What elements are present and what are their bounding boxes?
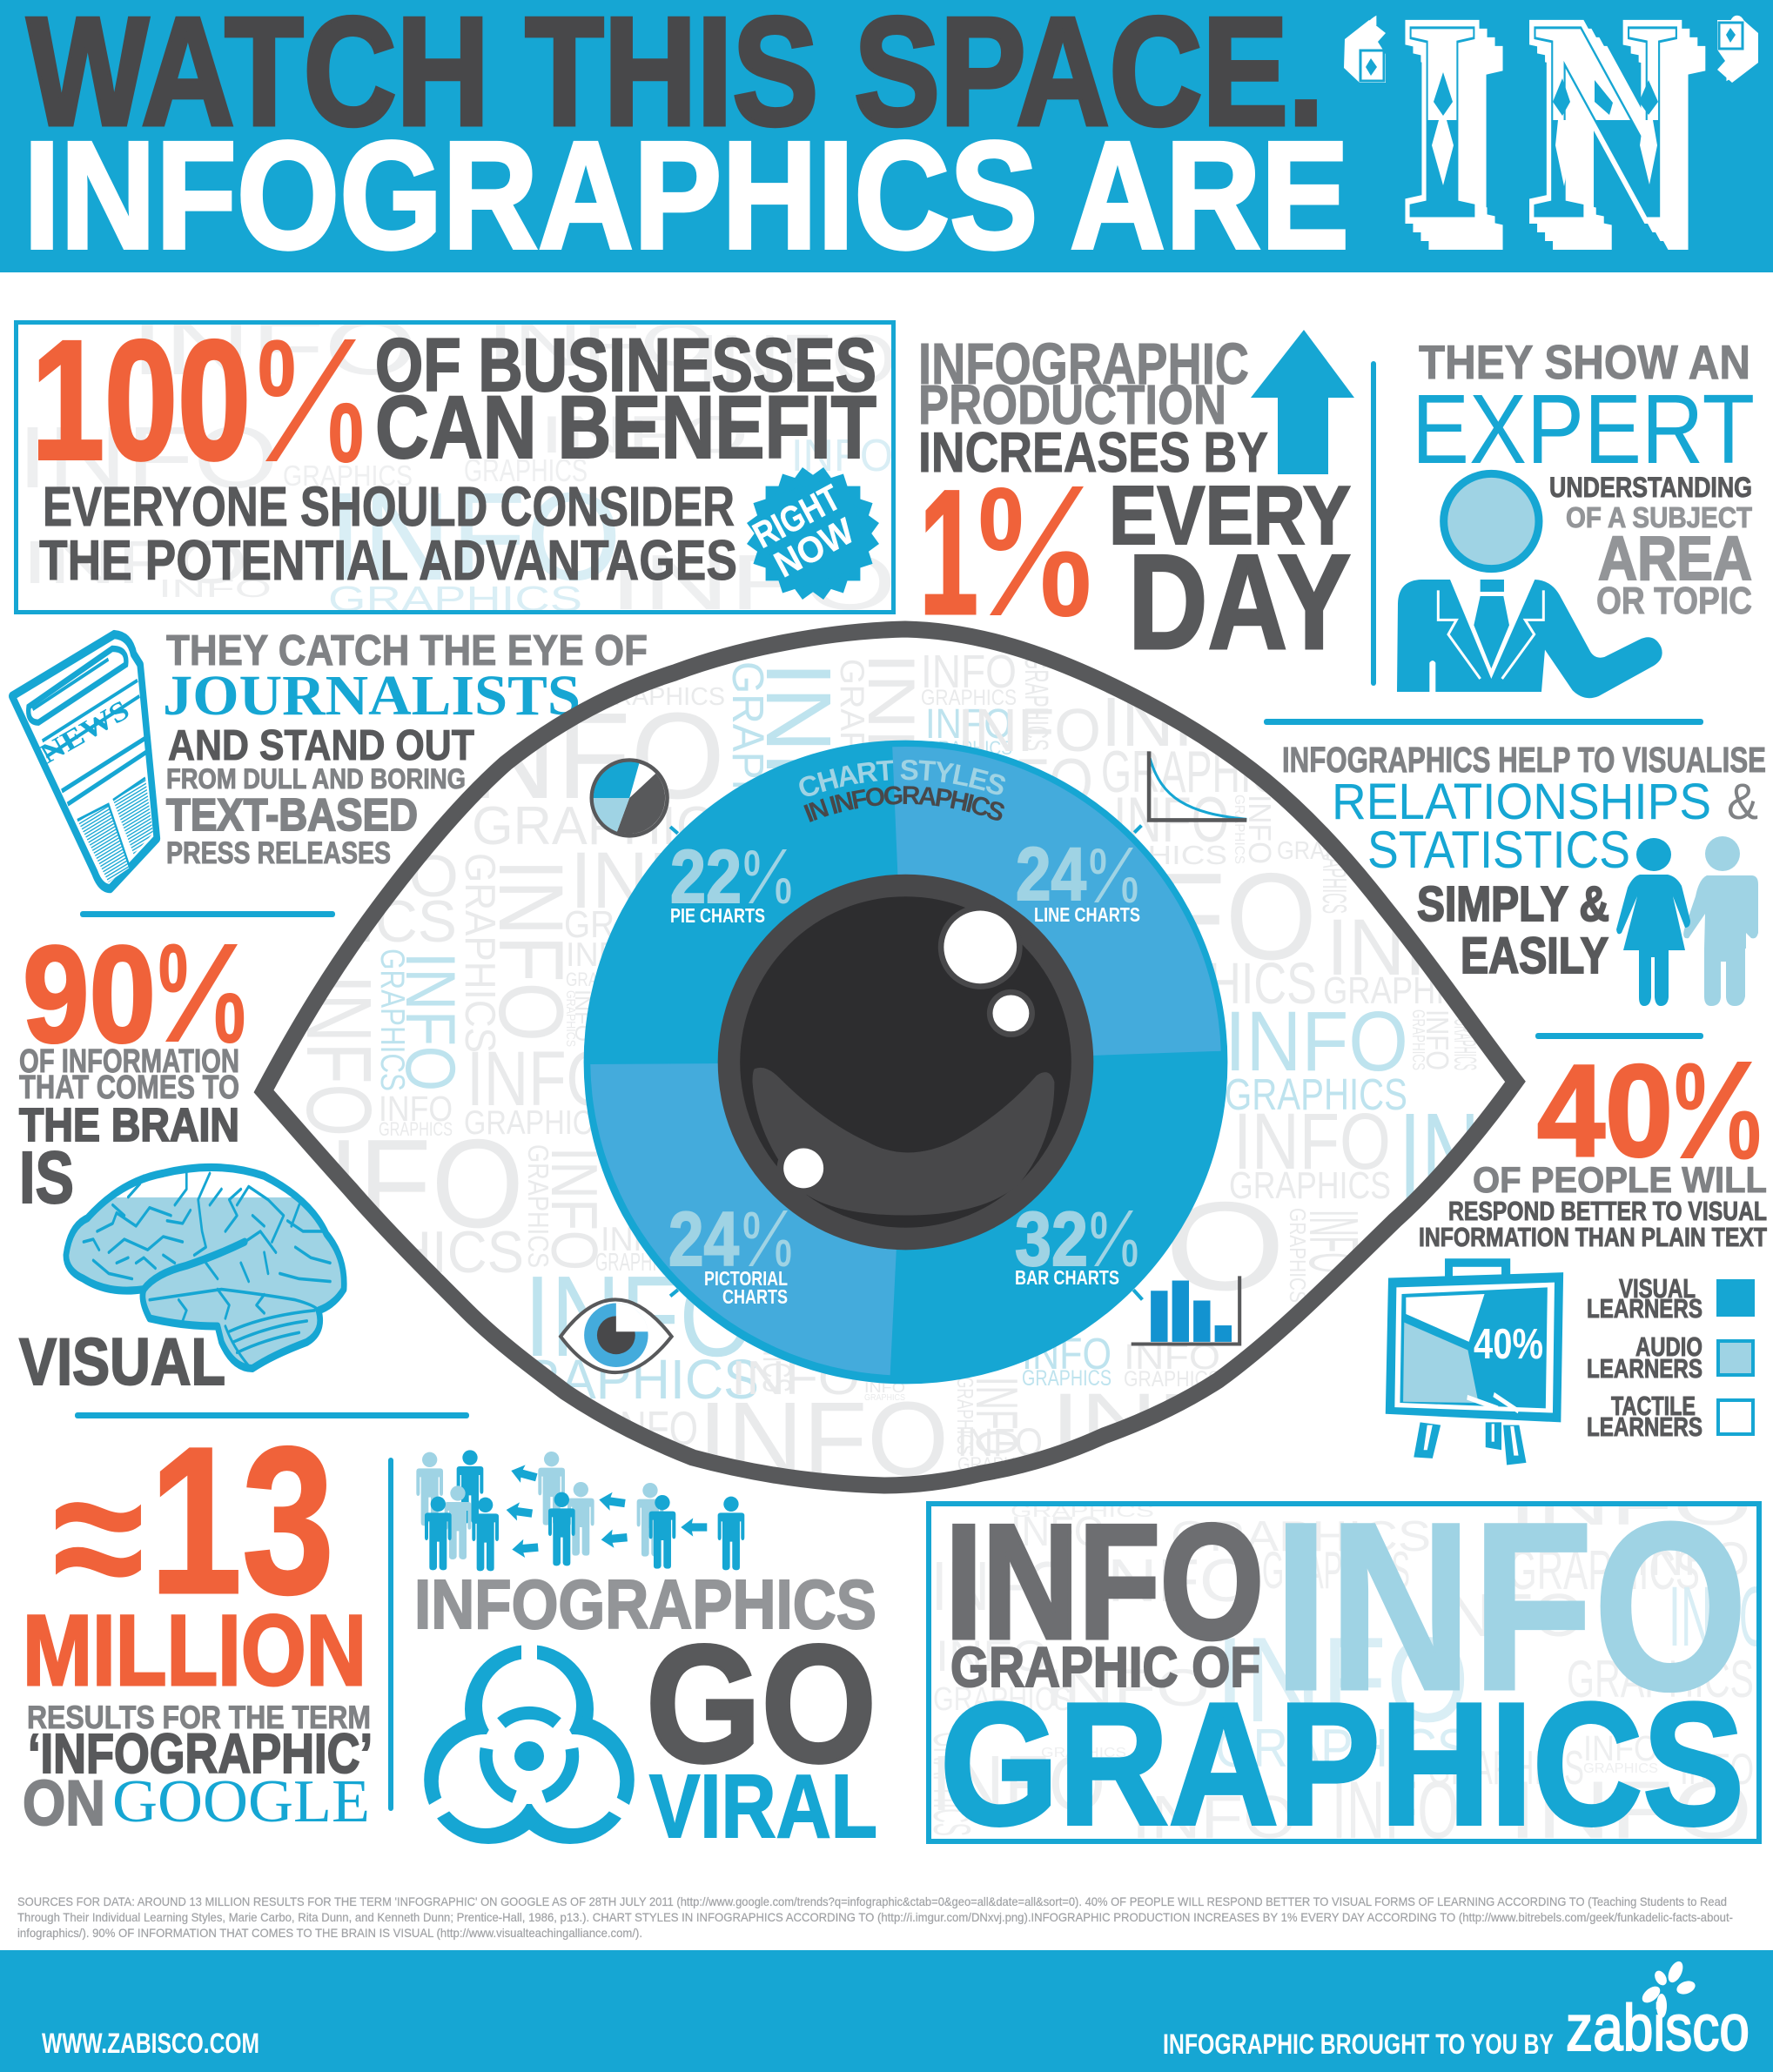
eye watermark background: INFO [524,1252,755,1380]
text: that comes to: THAT COMES TO [19,1070,239,1106]
icon: presentation board: 40% [1474,1321,1543,1368]
section: journalists [12,627,648,888]
eye watermark background: GRAPHICS [1447,1018,1483,1070]
title decorative word IN [1405,19,1706,250]
eye watermark background: INFO [921,646,1017,698]
number 40 percent [1537,1037,1761,1184]
stat: pictorial charts 24 percent: PICTORIAL [704,1267,788,1290]
footer website: WWW.ZABISCO.COM [42,2028,259,2059]
stat: line charts 24 percent: LINE CHARTS [1034,903,1140,926]
badge: right now [746,467,879,600]
eye watermark background: GRAPHICS [952,1377,978,1455]
legend: learner types: LEARNERS [1587,1293,1702,1324]
panel watermark: INFO [931,1547,1071,1625]
stat: pie charts 22 percent: 0 [743,842,761,883]
panel watermark: INFO [791,431,893,481]
eye watermark background: INFO [1233,1097,1391,1186]
pupil [718,875,1093,1250]
eye watermark background: INFO [601,1221,679,1258]
eye watermark background: GRAPHICS [456,853,503,1053]
symbol: approximately: ≈ [52,1430,144,1644]
eye watermark background: INFO [379,1089,453,1129]
panel watermark: GRAPHICS [933,1681,1071,1718]
number 90 percent: 90 [23,918,156,1071]
eye watermark background: INFO [609,1401,698,1455]
eye watermark background: GRAPHICS [1022,1366,1111,1391]
eye watermark background: INFO [1420,1009,1455,1070]
heading: can benefit: CAN BENEFIT [375,378,876,477]
panel watermark: INFO [1088,1546,1253,1614]
stat: line charts 24 percent: 24 [1016,833,1086,916]
eye watermark background: INFO [854,653,928,835]
eye watermark background: GRAPHICS [1285,1208,1311,1303]
eye watermark background: GRAPHICS [1232,795,1246,864]
stat: pictorial charts 24 percent [668,1196,792,1308]
eye watermark background: GRAPHICS [1277,837,1393,865]
panel watermark: GRAPHICS [328,579,582,619]
eye watermark background: GRAPHICS [864,1393,905,1403]
stat: pictorial charts 24 percent: CHARTS [722,1285,788,1308]
stat: pictorial charts 24 percent: 0 [742,1204,761,1247]
heading: of businesses: OF BUSINESSES [375,324,876,407]
eye watermark background: INFO [698,1379,949,1498]
footer band [0,1950,1773,2072]
icon: brain [66,1167,344,1368]
eye watermark background: INFO [1101,683,1275,761]
eye watermark background: INFO [957,1420,1043,1465]
eye watermark background: INFO [1113,785,1229,855]
eye watermark background: INFO [467,1035,615,1122]
badge: right now: RIGHT [746,476,847,556]
stat: bar charts 32 percent: BAR CHARTS [1015,1266,1119,1289]
text: graphic of: GRAPHIC OF [950,1635,1260,1699]
number 90 percent: 0 [158,932,188,1006]
eye watermark background: GRAPHICS [833,659,870,833]
eye watermark background: GRAPHICS [595,1249,679,1277]
number 40 percent: 0 [1728,1099,1761,1173]
icon: spreading people with arrows [416,1450,744,1571]
panel watermark: INFO [1332,1764,1459,1855]
eye watermark background: GRAPHICS [1124,1367,1220,1391]
text: of people will: OF PEOPLE WILL [1473,1159,1767,1200]
eye watermark background: INFO [864,1379,905,1396]
eye watermark background: INFO [305,843,459,909]
legend: learner types [1587,1273,1755,1442]
eye watermark background: INFO [1036,848,1317,986]
eye watermark background: GRAPHICS [1315,835,1353,914]
icon: bar chart [1132,1276,1239,1344]
big number 100 percent: 0 [328,387,364,479]
stat: production increases 1 percent [918,330,1354,677]
text: easily: EASILY [1461,928,1608,984]
eye watermark background: GRAPHICS [1225,1070,1407,1119]
panel watermark: INFO [931,1740,1105,1827]
text: go: GO [646,1610,876,1797]
eye watermark background: INFO [1326,903,1514,992]
icon: line chart [1149,751,1246,820]
text: area: AREA [1598,525,1752,593]
panel watermark: INFO [131,305,418,392]
eye watermark background: GRAPHICS [563,990,578,1047]
panel watermark: INFO [1583,1728,1658,1768]
eye watermark background: INFO [1051,1378,1306,1460]
number 90 percent [23,918,245,1071]
eye watermark background: GRAPHICS [921,686,1017,710]
text: and stand out: AND STAND OUT [168,722,474,769]
text: they catch the eye of: THEY CATCH THE EYE OF [166,627,648,674]
text: infographics: INFOGRAPHICS [414,1566,876,1643]
title line 2: INFOGRAPHICS ARE [24,111,1349,281]
stat: pie charts 22 percent [670,835,792,927]
text: day: DAY [1128,526,1351,677]
panel watermark: GRAPHICS [283,459,413,492]
stat: pie charts 22 percent: 22 [670,835,742,919]
chart title: chart styles [799,760,1005,822]
eye watermark background: GRAPHICS [149,888,457,955]
eye watermark background: INFO [566,936,644,974]
eye watermark background: INFO [1242,795,1278,864]
eye watermark background: GRAPHICS [472,796,750,856]
text: visual: VISUAL [19,1325,225,1399]
text: ampersand: & [1727,774,1758,830]
text: statistics: STATISTICS [1367,821,1630,879]
eye watermark background: INFO [287,975,390,1137]
icon: woman [1616,838,1690,1006]
eye watermark background: GRAPHICS [480,1348,759,1411]
iris doughnut chart [584,741,1227,1384]
stat: bar charts 32 percent: 0 [1090,1204,1108,1247]
text: production: PRODUCTION [918,373,1226,436]
text: the brain: THE BRAIN [19,1099,239,1151]
text: everyone should consider: EVERYONE SHOULD CONSIDER [43,475,735,538]
sources text: infographics/). 90% OF INFORMATION THAT COMES TO THE BRAIN IS VISUAL (http://www.visualteachingalliance.com/). [17,1926,642,1940]
number 13: 13 [150,1404,334,1637]
panel watermark [28,325,891,610]
panel border [929,1504,1759,1841]
icon: businessman [1397,473,1662,698]
icon: eye [561,1299,672,1372]
stat: line charts 24 percent: 0 [1121,869,1138,910]
eye watermark background: INFO [914,1176,1286,1317]
eye watermark background: GRAPHICS [594,683,725,711]
panel watermark: INFO [17,409,279,506]
eye watermark background [149,646,1593,1498]
footer credit: INFOGRAPHIC BROUGHT TO YOU BY [1163,2028,1554,2060]
section: 13 million results [23,1404,373,1839]
section: relationships and statistics [1282,740,1766,1006]
sources text [17,1894,1733,1940]
stat: bar charts 32 percent [1015,1196,1138,1289]
icon: man [1683,836,1758,1006]
stat: line charts 24 percent [1016,833,1140,926]
text: from dull and boring: FROM DULL AND BORING [166,763,466,795]
stat: bar charts 32 percent: 32 [1015,1196,1088,1282]
eye watermark background: INFO [964,1377,1030,1455]
text: increases by: INCREASES BY [918,420,1268,484]
opening quote ornament [1344,0,1386,208]
legend: learner types: TACTILE [1611,1391,1696,1421]
closing quote ornament [1717,0,1758,208]
legend: learner types: VISUAL [1619,1273,1696,1304]
eye watermark background: GRAPHICS [1101,739,1306,805]
icon: newspaper: NEWS [35,694,134,769]
stat: bar charts 32 percent: 0 [1121,1232,1138,1275]
eye watermark background: GRAPHICS [564,903,740,946]
text: press releases: PRESS RELEASES [166,836,391,870]
text: info dark: INFO [945,1491,1264,1673]
eye watermark background: INFO [1399,1087,1593,1224]
eye watermark background: INFO [239,1113,524,1254]
panel watermark: INFO [540,406,749,464]
header band [0,0,1773,272]
stat: pie charts 22 percent: 0 [775,870,792,911]
eye watermark background: INFO [1295,1210,1373,1273]
eye watermark background: GRAPHICS [566,969,644,990]
text: text-based: TEXT-BASED [166,790,418,841]
text: google: GOOGLE [112,1768,370,1835]
eye watermark background: GRAPHICS [1053,840,1227,870]
eye watermark background: INFO [538,1147,611,1271]
panel watermark: INFO [1011,1509,1105,1555]
legend: learner types: LEARNERS [1587,1412,1702,1442]
stat: pictorial charts 24 percent: 24 [668,1196,739,1282]
number 40 percent: 0 [1675,1052,1706,1123]
legend: learner types: LEARNERS [1587,1353,1702,1384]
text: the potential advantages: THE POTENTIAL ADVANTAGES [39,528,737,592]
eye watermark background: INFO [570,989,594,1042]
eye watermark background: GRAPHICS [723,661,773,879]
eye watermark background: INFO [747,661,850,879]
panel watermark: GRAPHICS [464,453,588,488]
section: infographics go viral [414,1450,877,1856]
eye watermark background: INFO [480,859,581,1042]
stat: pie charts 22 percent: PIE CHARTS [670,904,765,927]
panel watermark: INFO [22,528,248,596]
panel watermark: INFO [1044,1659,1210,1717]
big number 100 percent: 0 [258,325,296,412]
eye watermark background: GRAPHICS [1017,655,1054,751]
eye watermark background: GRAPHICS [1079,951,1317,1016]
panel watermark: GRAPHICS [1171,1513,1431,1560]
big number 100 percent: 100 [31,305,251,495]
eye watermark background: INFO [1124,1337,1220,1377]
panel watermark: GRAPHICS [1041,1746,1126,1760]
panel border [16,322,893,613]
panel watermark: INFO [1132,1783,1297,1851]
icon: pie chart [592,761,668,835]
icon: biohazard [424,1639,635,1844]
section: 90 percent visual [19,918,344,1399]
panel watermark: INFO [158,575,272,603]
eye watermark background: GRAPHICS [1323,969,1488,1012]
eye watermark background: GRAPHICS [1229,1164,1391,1207]
eye watermark background: INFO [957,696,1101,764]
number 1 percent: 1 [919,453,978,652]
eye watermark background: INFO [731,1351,860,1405]
panel watermark: GRAPHICS [1427,1740,1584,1794]
text: journalists: JOURNALISTS [163,664,581,728]
footer logo: zabisco [1566,1959,1749,2064]
eye watermark background: INFO [570,836,757,925]
text: viral: VIRAL [649,1756,877,1856]
eye watermark background: INFO [925,701,1012,748]
eye watermark background: GRAPHICS [235,1219,524,1285]
eye watermark background: INFO [957,747,1093,817]
number 1 percent: 0 [978,471,1024,568]
panel watermark: INFO [487,311,714,379]
chart: central eye with chart styles [179,621,1628,1533]
eye watermark background: GRAPHICS [925,737,1012,759]
panel watermark: GRAPHICS [1262,1541,1410,1599]
panel watermark: INFO [1427,1581,1584,1649]
number 1 percent [919,453,1091,652]
text: results for the term: RESULTS FOR THE TERM [27,1700,371,1735]
text: infographic term: ‘INFOGRAPHIC’ [28,1722,373,1785]
section: 40 percent of people [1386,1037,1767,1465]
panel: 100 percent of businesses [16,305,897,627]
chart title: chart styles: IN INFOGRAPHICS [803,786,1004,822]
eye watermark background: GRAPHICS [522,1144,554,1268]
eye watermark background: GRAPHICS [755,1279,800,1392]
chart title: chart styles: CHART STYLES [799,760,1005,796]
number 40 percent: 40 [1537,1037,1673,1184]
number 90 percent: 0 [214,979,245,1056]
text: GRAPHICS [923,1732,981,1836]
text: million: MILLION [23,1595,366,1707]
eye watermark background: GRAPHICS [464,1104,612,1142]
panel watermark: INFO [696,320,897,398]
eye watermark background: INFO [391,952,469,1091]
panel: infographic of infographics [926,1501,1762,1844]
panel watermark: INFO [609,540,897,627]
eye watermark background: GRAPHICS [1408,1009,1427,1070]
icon: presentation board [1386,1258,1563,1465]
text: of a subject: OF A SUBJECT [1566,501,1752,533]
stat: line charts 24 percent: 0 [1089,841,1107,882]
eye watermark background: GRAPHICS [957,1453,1043,1475]
text: of information: OF INFORMATION [19,1043,239,1080]
legend: learner types: AUDIO [1635,1331,1702,1362]
panel watermark: INFO [1508,1764,1752,1855]
eye watermark background: INFO [1225,994,1408,1089]
text: on: ON [23,1768,105,1839]
panel watermark: INFO [328,466,621,607]
eye watermark background: GRAPHICS [373,949,411,1091]
panel watermark: INFO [1508,1474,1752,1537]
text: every: EVERY [1109,469,1351,562]
text: infographic: INFOGRAPHIC [918,332,1249,397]
panel watermark: GRAPHICS [1583,1761,1658,1776]
panel watermark: GRAPHICS [1011,1502,1154,1521]
text: simply and: SIMPLY & [1417,876,1609,932]
text: is: IS [19,1137,74,1218]
panel watermark: GRAPHICS [1215,1719,1469,1779]
eye outline [264,629,1515,1485]
panel watermark: INFO [1636,1532,1749,1586]
text: relationships: RELATIONSHIPS [1332,774,1711,830]
arrow up [1251,330,1354,474]
panel watermark: INFO [936,1632,1049,1680]
panel watermark [933,1506,1756,1839]
eye watermark background: INFO [435,687,725,824]
stat: pictorial charts 24 percent: 0 [775,1232,792,1275]
section: expert [1397,335,1755,698]
panel watermark: INFO [1215,1613,1469,1747]
eye watermark background: INFO [1022,1329,1111,1378]
eye watermark background: GRAPHICS [379,1118,453,1140]
icon: newspaper [12,634,157,888]
number 1 percent: 0 [1040,534,1091,635]
badge: right now: NOW [768,510,861,585]
